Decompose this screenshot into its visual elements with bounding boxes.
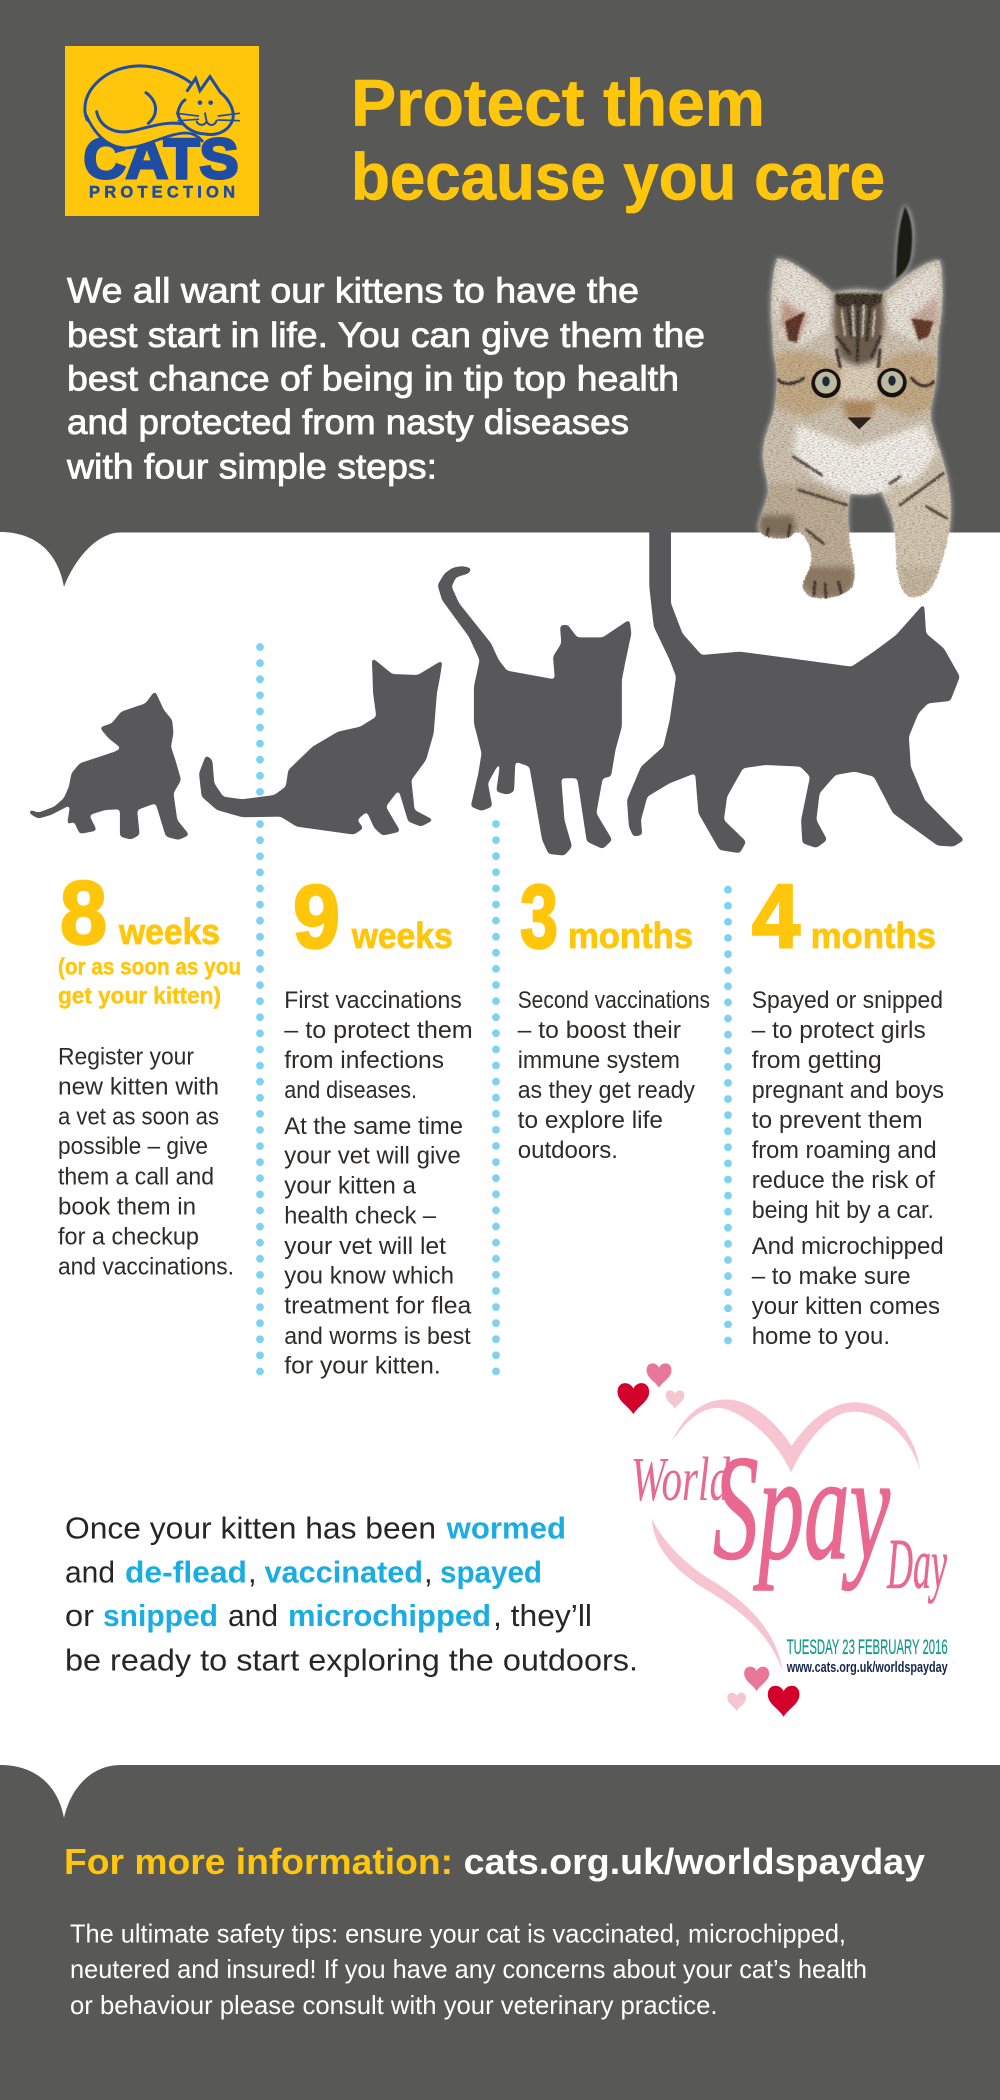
step 1 heading: weeks: [118, 911, 220, 952]
step 2: 9 weeks: [284, 868, 473, 1380]
step 3 heading: [520, 868, 693, 968]
step 2 body: your kitten a: [284, 1173, 417, 1200]
step 1: 8 weeks: [58, 864, 241, 1280]
intro text: [66, 272, 705, 486]
step 1 body: book them in: [58, 1193, 196, 1220]
step 3 body: [518, 987, 710, 1164]
step 2 body: from infections: [284, 1047, 444, 1074]
kitten eyes: [811, 368, 907, 398]
outdoors paragraph: spayed: [440, 1554, 542, 1589]
more information line: [64, 1841, 925, 1882]
step 2 body: you know which: [284, 1263, 454, 1290]
step 3 heading: months: [568, 915, 693, 956]
step 1 heading: (or as soon as you: [58, 953, 241, 979]
step 1 body: new kitten with: [58, 1073, 219, 1100]
dotted divider 3: [724, 890, 732, 1342]
step 3 heading: 3: [520, 868, 558, 968]
outdoors paragraph: or: [65, 1598, 94, 1633]
safety tips text: neutered and insured! If you have any concerns about your cat’s health: [70, 1954, 867, 1984]
step 1 body: a vet as soon as: [58, 1103, 219, 1130]
step 4 body: And microchipped: [752, 1233, 944, 1260]
more information line: cats.org.uk/worldspayday: [464, 1841, 925, 1882]
header band: [0, 0, 1000, 587]
step 1 body: them a call and: [58, 1164, 214, 1190]
step 1 body: for a checkup: [58, 1223, 199, 1250]
step 1 body: [58, 1044, 234, 1280]
silhouette: 3 month cat: [438, 566, 631, 856]
outdoors paragraph: be ready to start exploring the outdoors.: [65, 1642, 638, 1677]
kitten nose: [847, 417, 871, 429]
step 1 heading: get your kitten): [58, 983, 221, 1009]
step 4 body: – to protect girls: [752, 1017, 926, 1044]
step 1 body: Register your: [58, 1044, 194, 1070]
outdoors paragraph: ,: [424, 1554, 433, 1589]
step 2 heading: weeks: [351, 915, 453, 956]
outdoors paragraph: and: [65, 1554, 115, 1589]
step 2 body: and diseases.: [284, 1077, 417, 1104]
outdoors paragraph: de-flead: [125, 1554, 247, 1589]
step 3 body: as they get ready: [518, 1077, 695, 1104]
title: [351, 66, 885, 214]
step 4 body: home to you.: [752, 1323, 890, 1350]
silhouette: 9 week kitten: [199, 657, 443, 836]
footer band: [0, 1765, 1000, 2100]
intro text: We all want our kittens to have the: [67, 272, 639, 310]
date and web address: [786, 1636, 948, 1676]
dotted divider 1: [256, 647, 264, 1373]
step 3: 3 months: [518, 868, 710, 1164]
script wordmark: [631, 1425, 947, 1604]
safety tips text: [70, 1918, 867, 2020]
step 1 body: and vaccinations.: [58, 1254, 234, 1280]
step 3 body: immune system: [518, 1047, 680, 1074]
step 4 heading: [752, 867, 936, 967]
dotted divider 2: [492, 824, 500, 1373]
step 4 heading: months: [811, 915, 936, 956]
intro text: best chance of being in tip top health: [67, 360, 679, 399]
heart outline: [652, 1399, 920, 1672]
step 4 heading: 4: [752, 867, 800, 967]
step 1 heading: 8: [60, 864, 107, 964]
intro text: and protected from nasty diseases: [67, 403, 629, 442]
step 3 body: to explore life: [518, 1107, 663, 1134]
step 1 heading: [58, 864, 241, 1009]
step 2 body: for your kitten.: [284, 1352, 441, 1380]
script wordmark: Spay: [713, 1425, 890, 1591]
kitten halo: [758, 205, 951, 598]
step 2 body: health check –: [284, 1202, 437, 1229]
logo: Cats Protection: CATS: [84, 127, 238, 191]
step 2 body: At the same time: [284, 1113, 463, 1140]
silhouette: 8 week kitten: [29, 691, 189, 840]
step 3 body: outdoors.: [518, 1137, 618, 1164]
step 2 body: – to protect them: [284, 1017, 473, 1044]
outdoors paragraph: [65, 1510, 638, 1677]
step 2 body: and worms is best: [284, 1323, 471, 1350]
step 4 body: – to make sure: [752, 1263, 911, 1290]
outdoors paragraph: vaccinated: [264, 1554, 423, 1589]
step 1 body: possible – give: [58, 1133, 208, 1160]
step 4 body: from roaming and: [752, 1137, 937, 1164]
step 2 body: treatment for flea: [284, 1293, 472, 1320]
step 2 body: [284, 987, 473, 1380]
small hearts: [617, 1363, 799, 1717]
outdoors paragraph: and: [228, 1598, 278, 1633]
kitten body: [758, 258, 952, 600]
intro text: best start in life. You can give them the: [67, 316, 705, 355]
step 2 body: First vaccinations: [284, 987, 462, 1014]
safety tips text: or behaviour please consult with your veterinary practice.: [70, 1990, 718, 2020]
step 2 body: your vet will give: [284, 1143, 461, 1170]
outdoors paragraph: , they’ll: [493, 1598, 592, 1633]
title: Protect them: [351, 66, 765, 140]
step 3 body: – to boost their: [518, 1017, 681, 1044]
step 4 body: [752, 987, 944, 1350]
step 4 body: to prevent them: [752, 1107, 923, 1134]
outdoors paragraph: snipped: [103, 1598, 218, 1633]
step 4 body: reduce the risk of: [752, 1167, 935, 1194]
step 4 body: being hit by a car.: [752, 1197, 934, 1224]
step 4 body: Spayed or snipped: [752, 987, 943, 1014]
more information line: For more information:: [64, 1841, 453, 1882]
cat silhouettes: [29, 527, 964, 856]
kitten photo illustration: [754, 204, 954, 600]
step 4: 4 months: [752, 867, 944, 1350]
logo: Cats Protection: PROTECTION: [89, 184, 235, 202]
silhouette: 4 month cat: [627, 527, 964, 853]
outdoors paragraph: ,: [248, 1554, 257, 1589]
step 4 body: your kitten comes: [752, 1293, 940, 1320]
logo: Cats Protection: [65, 46, 259, 216]
title: because you care: [351, 140, 885, 214]
kitten tail: [896, 207, 912, 278]
World Spay Day logo: [617, 1363, 948, 1717]
step 4 body: from getting: [752, 1047, 882, 1074]
safety tips text: The ultimate safety tips: ensure your cat is vaccinated, microchipped,: [70, 1918, 846, 1948]
outdoors paragraph: wormed: [446, 1510, 566, 1545]
step 2 heading: [293, 868, 453, 968]
step 3 body: Second vaccinations: [518, 987, 710, 1014]
intro text: with four simple steps:: [66, 448, 437, 486]
script wordmark: World: [631, 1446, 731, 1514]
step 4 body: pregnant and boys: [752, 1077, 944, 1104]
step 2 body: your vet will let: [284, 1233, 446, 1260]
outdoors paragraph: microchipped: [288, 1598, 491, 1633]
outdoors paragraph: Once your kitten has been: [65, 1510, 436, 1545]
step 2 heading: 9: [293, 868, 340, 968]
